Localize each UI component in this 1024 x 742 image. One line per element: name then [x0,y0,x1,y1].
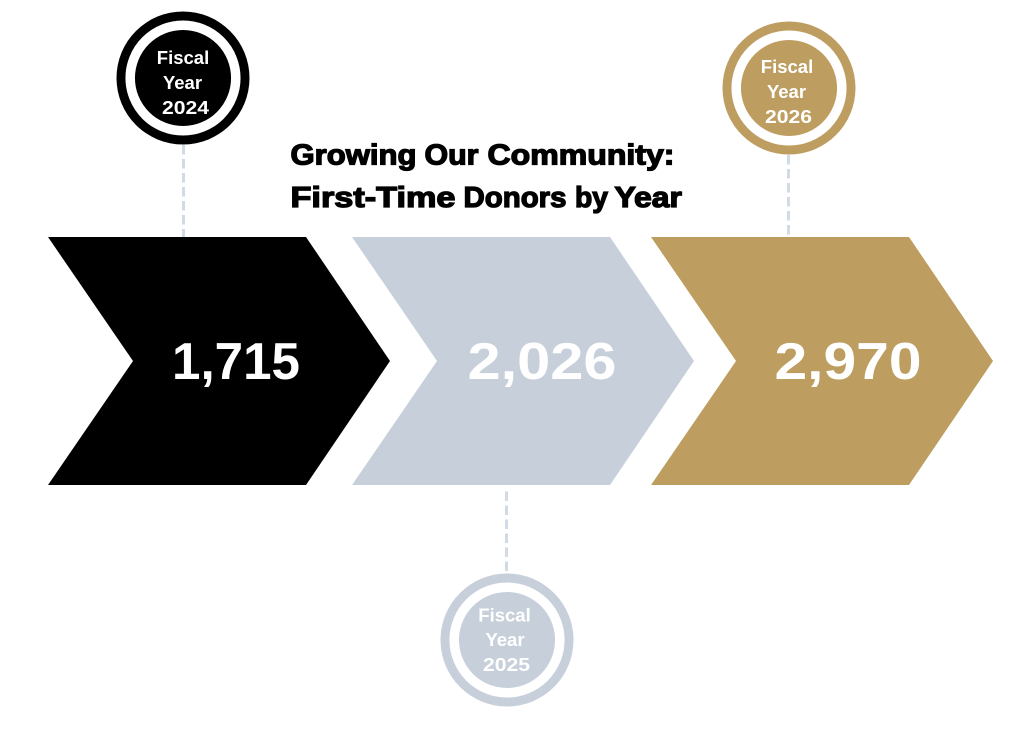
title: Growing [290,140,416,172]
badge: fiscal year 2025 [440,574,574,706]
arrow: 2025 value: 2,026 [468,333,616,391]
badge: fiscal year 2024: 2024 [162,97,210,118]
arrow: 2026 value [651,237,993,485]
title: Year [614,182,682,214]
connector: fiscal year 2024 [182,145,185,237]
badge: fiscal year 2024: Fiscal [157,47,209,68]
title: Donors [464,182,566,214]
title: Community: [488,140,674,172]
badge: fiscal year 2026: Fiscal [761,56,813,77]
connector: fiscal year 2026 [787,155,790,237]
title: Our [424,140,478,172]
badge: fiscal year 2026 [722,22,856,154]
connector: fiscal year 2025 [505,492,508,574]
title: by [575,182,608,214]
badge: fiscal year 2025: Fiscal [478,604,531,626]
badge: fiscal year 2026: Year [767,81,806,102]
badge: fiscal year 2025: 2025 [483,654,530,675]
arrow: 2024 value: 1,715 [172,333,300,391]
title [290,140,682,214]
arrow: 2024 value [48,237,390,485]
title: First-Time [290,182,456,214]
badge: fiscal year 2025: Year [485,629,525,650]
badge: fiscal year 2026: 2026 [765,106,812,127]
badge: fiscal year 2024 [116,12,250,144]
badge: fiscal year 2024: Year [163,72,202,93]
arrow: 2025 value [352,237,694,485]
arrow: 2026 value: 2,970 [774,333,922,391]
